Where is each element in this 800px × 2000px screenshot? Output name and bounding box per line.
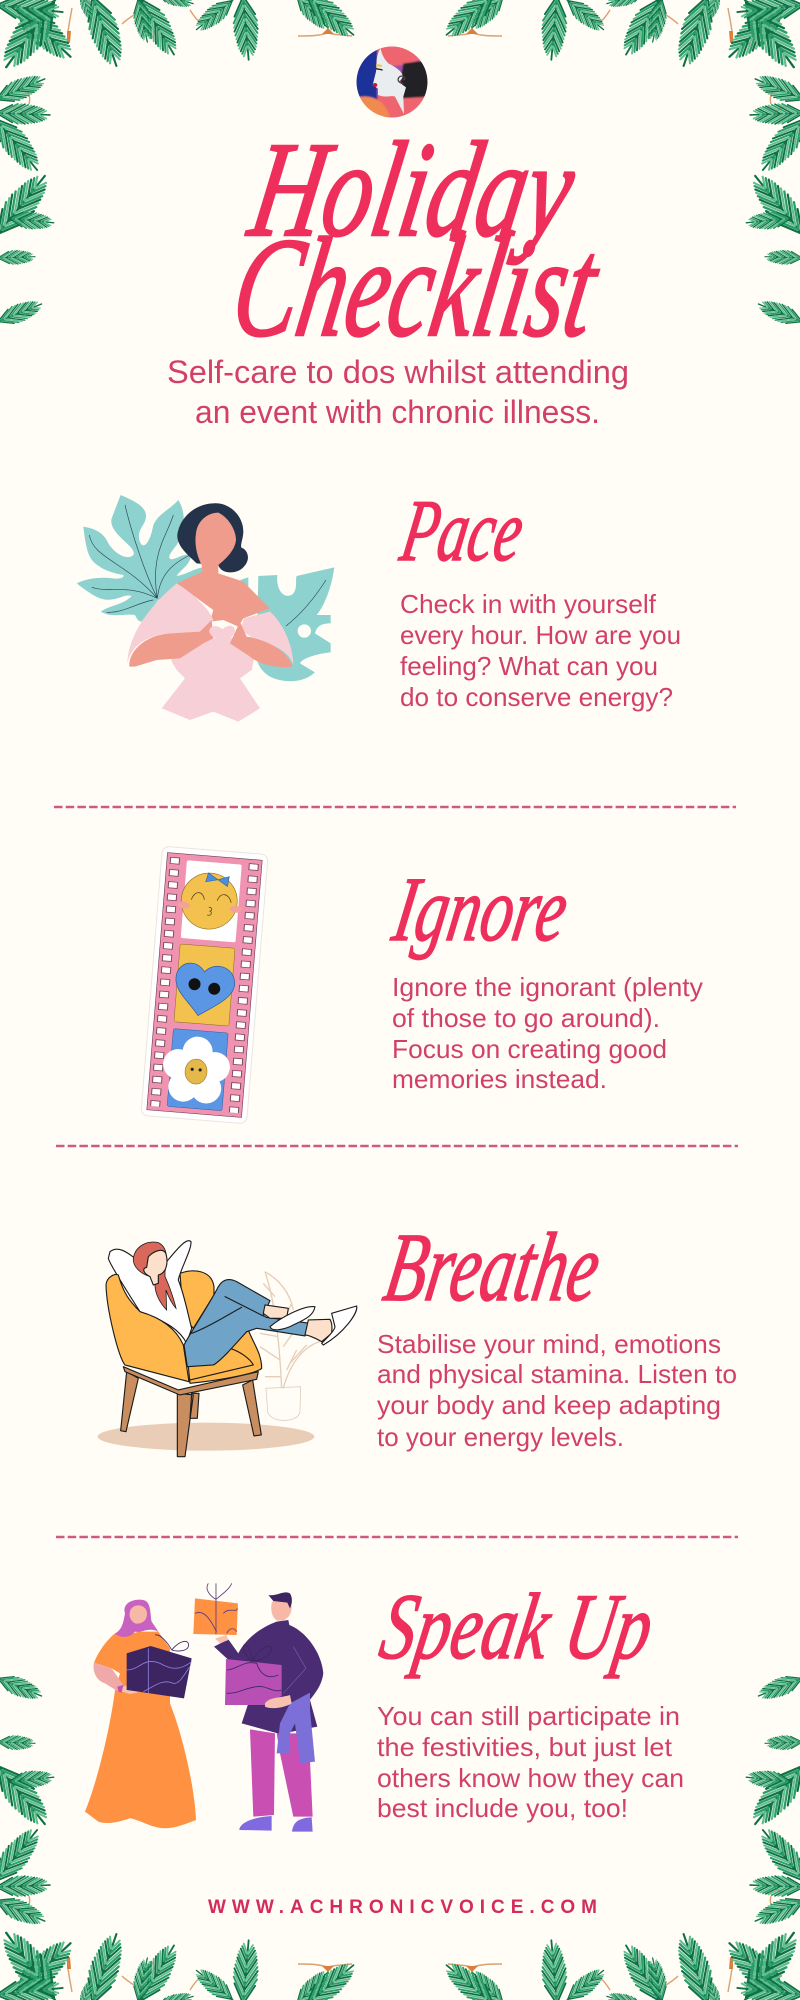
orange gift box (193, 1583, 238, 1643)
text: Breathe body: to your energy levels. (377, 1422, 624, 1452)
hair (177, 503, 248, 572)
heading: Pace: Pace (394, 483, 531, 580)
monstera leaf left (77, 495, 203, 622)
chair legs (121, 1372, 261, 1457)
subtitle: an event with chronic illness. (195, 394, 600, 430)
monstera leaf right (240, 567, 334, 681)
text: Pace body: feeling? What can you (400, 651, 658, 681)
jeans (184, 1280, 310, 1367)
man in purple tunic (214, 1592, 323, 1832)
title line: Checklist: Checklist (223, 208, 611, 366)
text: Pace body: Check in with yourself (400, 589, 657, 619)
text: Pace body (400, 589, 681, 712)
pine corner: top left (0, 0, 361, 330)
sleeves (127, 583, 213, 663)
text: Speak Up body: the festivities, but just let (377, 1732, 673, 1762)
illustration: couple exchanging gifts (85, 1583, 323, 1832)
text: Speak Up body (377, 1701, 684, 1823)
frame: smiling white flower (160, 1028, 233, 1111)
pine corner: top right (439, 0, 800, 330)
heading: Breathe: Breathe (377, 1214, 608, 1322)
face (195, 513, 236, 575)
text: Speak Up body: You can still participate in (377, 1701, 680, 1731)
crossed foot and slipper (263, 1305, 288, 1318)
heart (209, 626, 235, 643)
frame: blue heart face (172, 944, 238, 1026)
illustration: woman relaxing in yellow armchair (98, 1241, 357, 1457)
armchair seat (188, 1330, 262, 1383)
text: Breathe body: and physical stamina. Listen to (377, 1359, 737, 1389)
text: Pace body: do to conserve energy? (400, 682, 673, 712)
website url: WWW.ACHRONICVOICE.COM (208, 1897, 597, 1918)
illustration: film strip sticker with three faces (141, 846, 268, 1124)
hair (133, 1242, 176, 1310)
pine corner: bottom left (0, 1670, 361, 2000)
magenta gift box (225, 1645, 292, 1708)
text: Speak Up body: others know how they can (377, 1763, 684, 1793)
text: Breathe body: your body and keep adapting (377, 1390, 721, 1420)
chest and neck (177, 572, 270, 627)
text: Breathe body: Stabilise your mind, emotions (377, 1329, 721, 1359)
armchair side (106, 1275, 189, 1382)
illustration: woman making a heart with hands (77, 495, 334, 722)
pine corner: bottom right (439, 1670, 800, 2000)
heading: Ignore: Ignore (386, 859, 575, 961)
white shirt (108, 1241, 192, 1343)
frame: kissing yellow face (175, 860, 245, 943)
text: Pace body: every hour. How are you (400, 620, 681, 650)
text: Speak Up body: best include you, too! (377, 1793, 628, 1823)
armchair back (180, 1271, 214, 1328)
arms (129, 620, 213, 667)
text: Ignore body (392, 972, 703, 1094)
face (144, 1250, 167, 1285)
subtitle: Self-care to dos whilst attending (167, 354, 629, 390)
dark gift box (127, 1635, 192, 1698)
logo: watercolour profile portrait (356, 46, 428, 118)
ground shadow (98, 1423, 314, 1451)
heading: Speak Up: Speak Up (373, 1576, 661, 1679)
text: Ignore body: Ignore the ignorant (plenty (392, 972, 703, 1002)
woman in orange dress (85, 1600, 196, 1828)
raised foot and slipper (305, 1319, 332, 1342)
title (223, 114, 611, 366)
text: Ignore body: of those to go around). (392, 1003, 660, 1033)
text: Breathe body (377, 1329, 737, 1452)
text: Ignore body: Focus on creating good (392, 1034, 667, 1064)
title line: Holiday: Holiday (239, 114, 585, 265)
text: Ignore body: memories instead. (392, 1064, 607, 1094)
dress (162, 637, 260, 722)
potted plant (260, 1272, 320, 1420)
subtitle (167, 354, 629, 430)
